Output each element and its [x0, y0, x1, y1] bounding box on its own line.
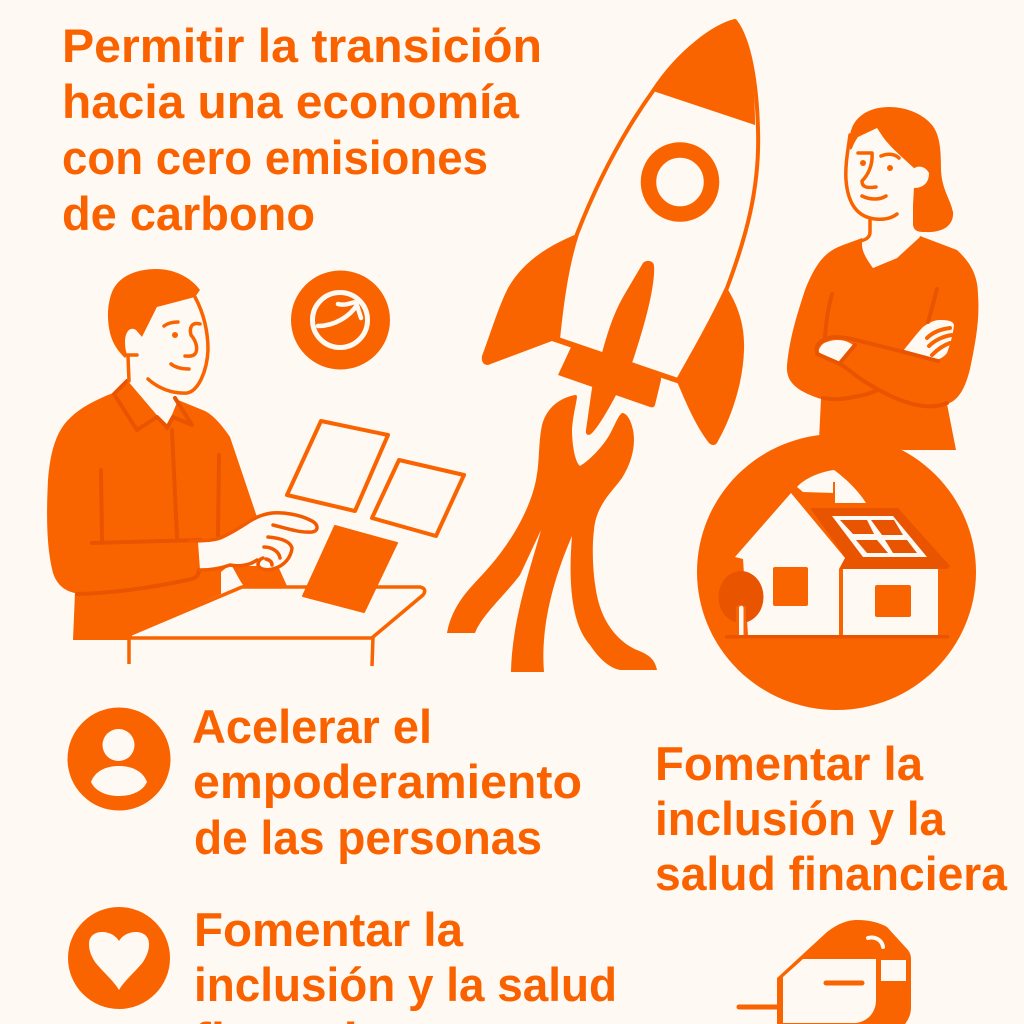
right fin — [676, 288, 744, 445]
title — [62, 19, 542, 240]
face — [125, 297, 208, 393]
sun or cloud shape — [797, 470, 866, 503]
hair — [108, 269, 200, 358]
icon: person — [68, 708, 170, 810]
dark roof — [810, 508, 950, 569]
icon: globe with arrow — [291, 270, 390, 370]
rocket base line — [552, 339, 680, 382]
face lines — [846, 135, 899, 241]
house left window — [773, 567, 808, 606]
floating card 1 — [287, 421, 388, 511]
house left body — [735, 493, 845, 635]
rocket window — [648, 150, 712, 214]
exhaust flames — [447, 395, 657, 672]
table — [129, 587, 425, 666]
arm lines and hands — [817, 289, 954, 406]
text: inclusion left — [194, 903, 617, 1024]
floating card 2 — [372, 460, 464, 536]
circle — [697, 434, 976, 710]
left fin — [482, 234, 577, 365]
hand — [198, 513, 317, 570]
text: inclusion left: Fomentar la — [194, 903, 464, 956]
orange patch under hand — [232, 566, 287, 586]
rocket nose — [653, 21, 755, 125]
text: empowerment — [192, 700, 582, 864]
title: Permitir la transición — [62, 19, 542, 72]
tablet — [303, 526, 397, 612]
tree — [718, 571, 764, 637]
illustration: rocket — [447, 21, 758, 672]
solar panel — [832, 516, 927, 557]
house right window — [875, 585, 911, 617]
text: inclusion right: inclusión y la — [655, 792, 946, 845]
hair — [850, 107, 953, 232]
sweater — [787, 236, 978, 450]
orange flag line — [833, 482, 835, 503]
neck — [128, 379, 175, 427]
text: inclusion right: Fomentar la — [655, 737, 924, 790]
rocket body — [558, 21, 758, 380]
icon: heart — [68, 907, 170, 1009]
text: empowerment: empoderamiento — [193, 755, 582, 808]
title: con cero emisiones — [62, 131, 488, 184]
illustration: man at table — [47, 269, 464, 666]
text: empowerment: Acelerar el — [192, 700, 432, 753]
title: de carbono — [62, 187, 315, 240]
text: inclusion left: inclusión y la salud — [194, 958, 617, 1011]
icon: house with solar panels in circle — [697, 434, 976, 710]
text: empowerment: de las personas — [194, 811, 542, 864]
rocket central flame — [586, 261, 654, 435]
shirt — [47, 380, 260, 640]
house right body — [843, 569, 938, 635]
ear — [913, 167, 929, 188]
illustration: woman with crossed arms — [787, 107, 978, 450]
wrist gap — [221, 569, 243, 593]
text: inclusion right: salud financiera — [655, 847, 1008, 900]
shirt fold lines — [77, 381, 219, 594]
face lines — [127, 297, 208, 393]
finger lines — [190, 513, 317, 570]
face — [846, 128, 920, 268]
title: hacia una economía — [62, 75, 520, 128]
ground line — [725, 635, 949, 638]
icon: piggy bank or wallet head — [739, 920, 911, 1024]
rocket nozzle — [558, 345, 661, 407]
text: inclusion right — [655, 737, 1008, 900]
